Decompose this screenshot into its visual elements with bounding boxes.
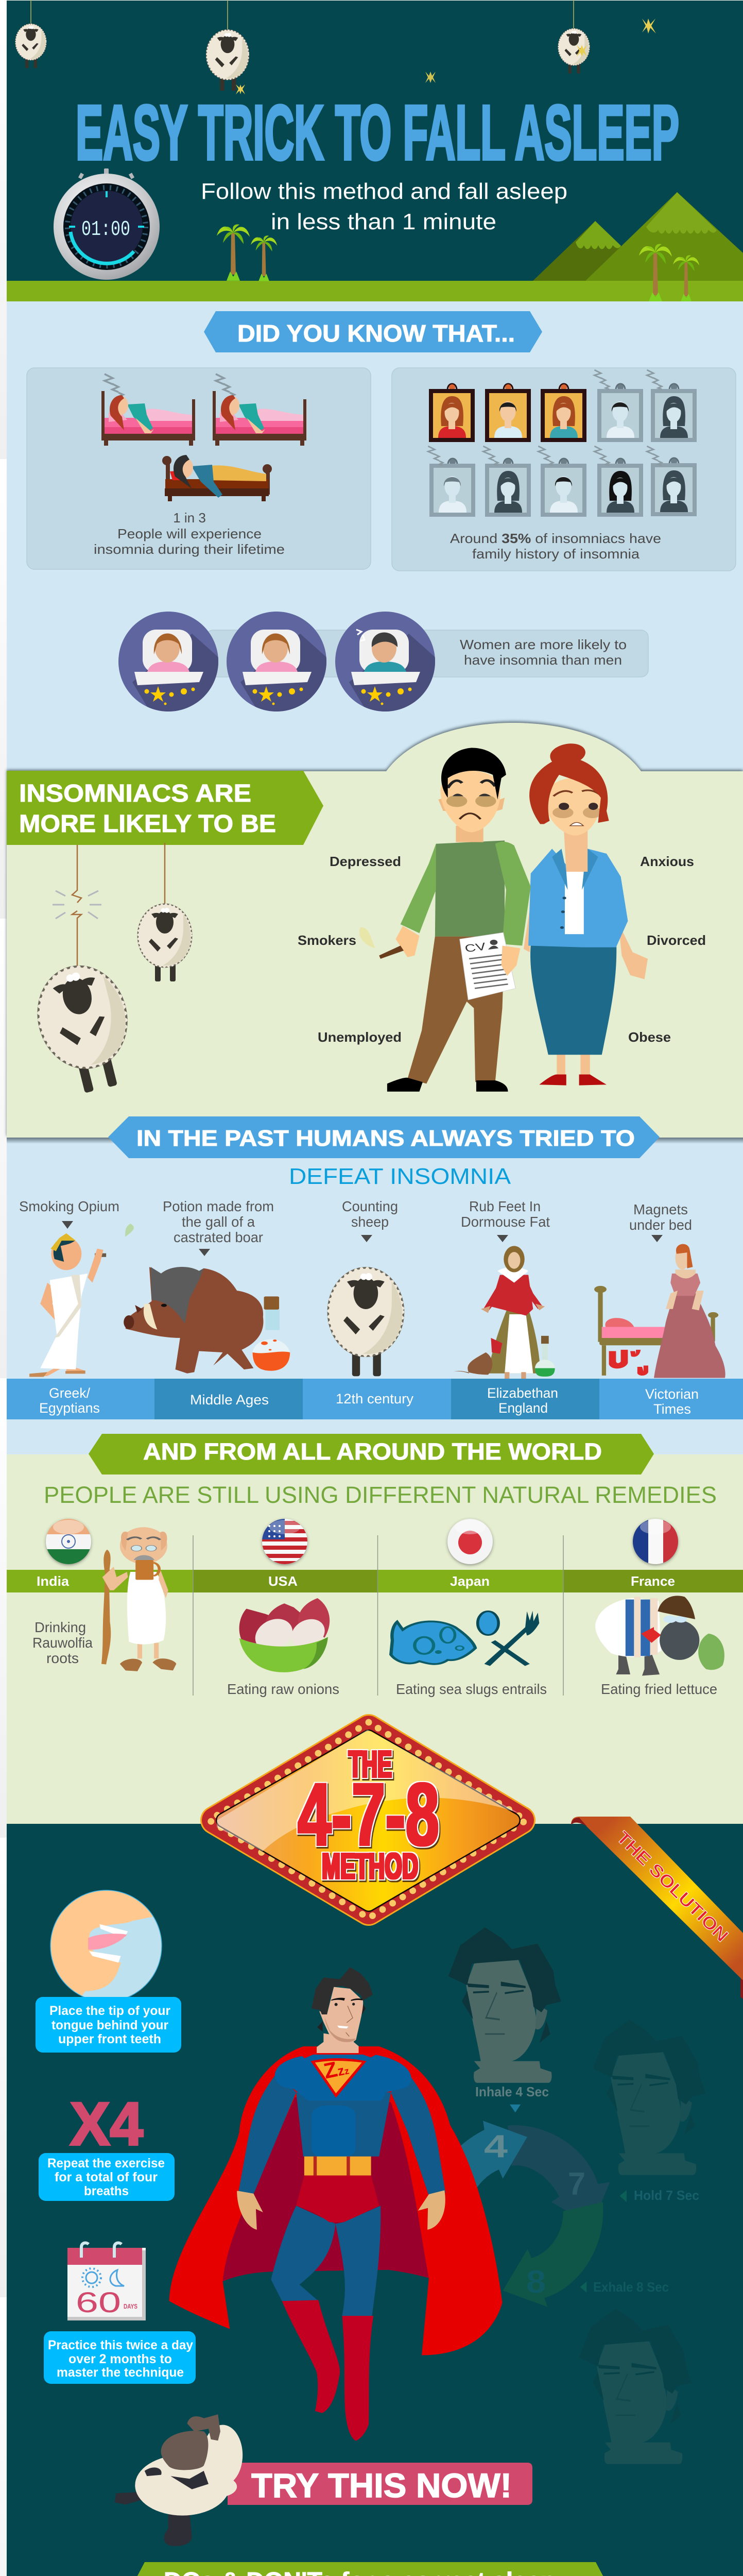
man xyxy=(359,748,531,1092)
callout: repeat exercise xyxy=(39,2153,175,2201)
sign: 4-7-8 method xyxy=(209,1722,526,1918)
heading: dos and donts xyxy=(7,2562,743,2576)
icon: flag france xyxy=(633,1519,678,1564)
illustration: greek smoking opium xyxy=(29,1224,134,1377)
text: past remedy labels xyxy=(19,1198,692,1245)
chart: breathing cycle arrows: 4 xyxy=(484,2129,508,2164)
text: likely labels: Anxious xyxy=(640,854,694,869)
heading: insomniacs: INSOMNIACS ARE xyxy=(19,780,251,807)
illustration: tongue placement xyxy=(50,1890,162,2004)
chart: breathing cycle arrows: Inhale 4 Sec xyxy=(475,2084,549,2099)
page side strip xyxy=(0,0,7,2576)
callout: repeat exercise: breaths xyxy=(84,2184,129,2198)
mountains xyxy=(533,192,743,281)
illustration: sheep with cat xyxy=(115,2414,243,2546)
text: likely labels: Obese xyxy=(628,1029,671,1045)
subheading: natural remedies: PEOPLE ARE STILL USING DIFFERENT NATURAL REMEDIES xyxy=(44,1482,717,1508)
icon: sleeper woman 1 xyxy=(118,612,218,711)
text: world remedies: Eating raw onions xyxy=(227,1681,339,1697)
country bar: India xyxy=(37,1573,70,1589)
text: family history: family history of insomnia xyxy=(472,546,640,562)
timeline bar: Greek/ xyxy=(49,1385,90,1401)
timeline bar: Elizabethan xyxy=(487,1385,558,1401)
illustration: tired man and woman xyxy=(359,743,648,1092)
text: past remedy labels: Potion made from xyxy=(163,1198,274,1214)
icon: hanging sheep xyxy=(15,0,590,91)
country bar: USA xyxy=(268,1573,298,1589)
text: past remedy labels: under bed xyxy=(629,1217,692,1233)
text: past remedy labels: the gall of a xyxy=(182,1214,255,1230)
panel: family history xyxy=(392,368,736,571)
illustration: elizabethan woman and mouse xyxy=(453,1246,555,1379)
panel: 1 in 3 xyxy=(27,368,371,569)
sign: 4-7-8 method: 4-7-8 xyxy=(298,1765,439,1864)
text: past remedy labels: Smoking Opium xyxy=(19,1198,119,1214)
illustration: sea slug and cutlery xyxy=(391,1611,539,1666)
callout: tongue tip xyxy=(36,1997,181,2053)
text: likely labels: Divorced xyxy=(647,933,706,948)
text: past remedy labels: Dormouse Fat xyxy=(461,1214,550,1230)
subtitle xyxy=(201,179,567,234)
icon: calendar: DAYS xyxy=(124,2302,137,2310)
text: past remedy labels: Magnets xyxy=(633,1201,688,1217)
timeline bar: Victorian xyxy=(645,1386,699,1402)
callout: practice twice: Practice this twice a day xyxy=(48,2338,193,2352)
icon: family portraits xyxy=(428,370,697,517)
illustration: boar and potion xyxy=(124,1267,290,1374)
icon: stars xyxy=(236,19,656,94)
subheading: defeat insomnia: DEFEAT INSOMNIA xyxy=(289,1164,511,1189)
panel: around the world xyxy=(7,1434,743,1831)
chart: breathing cycle arrows: Hold 7 Sec xyxy=(634,2188,699,2203)
text: likely labels: Unemployed xyxy=(318,1029,402,1045)
icon: palm trees xyxy=(217,225,699,301)
heading: around the world xyxy=(89,1434,654,1475)
ribbon: the solution xyxy=(571,1817,743,1999)
illustration: indian man xyxy=(101,1527,176,1671)
chart: breathing cycle arrows: 8 xyxy=(526,2264,546,2300)
heading: did you know: DID YOU KNOW THAT... xyxy=(237,320,515,347)
callout: tongue tip: Place the tip of your xyxy=(49,2004,170,2018)
panel: did you know xyxy=(7,301,743,771)
text: past remedy labels: castrated boar xyxy=(174,1229,263,1245)
callout: repeat exercise: Repeat the exercise xyxy=(47,2156,165,2171)
sign: 4-7-8 method: METHOD xyxy=(322,1846,418,1886)
timeline bar: Egyptians xyxy=(39,1400,100,1416)
man: CV xyxy=(463,941,487,955)
text: india remedy xyxy=(32,1619,93,1666)
callout: tongue tip: upper front teeth xyxy=(58,2032,161,2046)
panel: past remedies xyxy=(7,1116,743,1454)
chart: breathing cycle arrows xyxy=(458,2084,699,2307)
heading: insomniacs xyxy=(7,771,323,845)
icon: sleeper woman 2 xyxy=(227,612,326,711)
heading: in the past: IN THE PAST HUMANS ALWAYS TRIED TO xyxy=(136,1126,635,1151)
chart: breathing cycle arrows: 7 xyxy=(568,2166,585,2202)
callout: practice twice: over 2 months to xyxy=(68,2352,172,2366)
icon: sleeper man xyxy=(335,612,435,711)
heading: insomniacs: MORE LIKELY TO BE xyxy=(19,810,276,838)
illustration: superhero xyxy=(169,1967,503,2441)
illustration: onions xyxy=(239,1598,330,1672)
icon: flag india xyxy=(46,1519,91,1564)
text: family history: Around 35% of insomniacs have xyxy=(450,531,661,546)
icon: calendar xyxy=(67,2243,146,2320)
callout: practice twice xyxy=(44,2331,196,2384)
text: family history xyxy=(450,531,661,562)
text: india remedy: Drinking xyxy=(34,1619,86,1635)
icon: sheep with broken rope xyxy=(26,843,192,1100)
callout: try this now: TRY THIS NOW! xyxy=(251,2466,512,2504)
panel: the solution xyxy=(7,1824,743,2576)
text: past remedy labels: Counting xyxy=(342,1198,398,1214)
country bar: France xyxy=(631,1573,675,1589)
ghost: exhale head xyxy=(579,2309,692,2464)
text: 1 in 3: insomnia during their lifetime xyxy=(94,541,285,557)
icon: counting sheep xyxy=(327,1267,404,1376)
icon: flag usa xyxy=(262,1519,307,1564)
text: past remedy labels: sheep xyxy=(351,1214,389,1230)
illustration: victorian woman and bed xyxy=(594,1244,725,1378)
subtitle: Follow this method and fall asleep xyxy=(201,179,567,204)
text: india remedy: roots xyxy=(46,1650,79,1666)
ground xyxy=(7,281,743,301)
callout: practice twice: master the technique xyxy=(57,2365,184,2380)
icon: calendar: 60 xyxy=(76,2286,121,2318)
timeline bar xyxy=(7,1379,743,1419)
sign: 4-7-8 method: THE xyxy=(349,1744,392,1785)
icon: flag japan xyxy=(447,1519,493,1564)
text: emblem zzz: Zzz xyxy=(321,2055,351,2083)
text: likely labels: Smokers xyxy=(298,933,356,948)
ghost: hold head xyxy=(593,2020,706,2175)
text: 1 in 3 xyxy=(94,510,285,557)
text: india remedy: Rauwolfia xyxy=(32,1635,93,1651)
text: world remedies: Eating sea slugs entrails xyxy=(396,1681,547,1697)
icon: pointer triangles xyxy=(62,1221,663,1256)
heading: did you know xyxy=(204,311,542,352)
timeline bar: England xyxy=(498,1400,548,1416)
subtitle: in less than 1 minute xyxy=(271,209,496,234)
text: women vs men: have insomnia than men xyxy=(464,652,622,668)
icon: stopwatch: 01:00 xyxy=(81,218,130,242)
text: world remedies: Eating fried lettuce xyxy=(601,1681,717,1697)
woman xyxy=(524,743,648,1086)
text: women vs men: Women are more likely to xyxy=(460,637,627,652)
text: 1 in 3: People will experience xyxy=(117,526,262,541)
ribbon: the solution: THE SOLUTION xyxy=(613,1828,732,1946)
heading: in the past xyxy=(108,1116,660,1158)
country bar xyxy=(7,1570,743,1592)
text: likely labels xyxy=(298,854,706,1045)
text: world remedies xyxy=(227,1681,717,1697)
country bar: Japan xyxy=(450,1573,490,1589)
heading: around the world: AND FROM ALL AROUND THE WORLD xyxy=(143,1438,602,1465)
callout: tongue tip: tongue behind your xyxy=(51,2018,168,2032)
icon: stopwatch xyxy=(54,168,160,280)
text: women vs men xyxy=(460,637,627,668)
timeline bar: Middle Ages xyxy=(190,1392,269,1408)
panel: insomniacs xyxy=(7,723,743,1138)
chart: breathing cycle arrows: Exhale 8 Sec xyxy=(593,2279,669,2295)
timeline bar: 12th century xyxy=(336,1391,414,1406)
text: 1 in 3: 1 in 3 xyxy=(173,510,206,526)
text: likely labels: Depressed xyxy=(330,854,401,869)
text: x4: X4 xyxy=(70,2090,143,2158)
panel: hero xyxy=(7,0,743,301)
illustration: french sheep with lettuce xyxy=(595,1596,724,1676)
text: past remedy labels: Rub Feet In xyxy=(469,1198,541,1214)
timeline bar: Times xyxy=(653,1401,691,1417)
ghost: inhale head xyxy=(448,1927,561,2083)
panel: women vs men xyxy=(118,612,649,711)
callout: repeat exercise: for a total of four xyxy=(55,2170,158,2184)
icon: beds xyxy=(101,374,306,501)
